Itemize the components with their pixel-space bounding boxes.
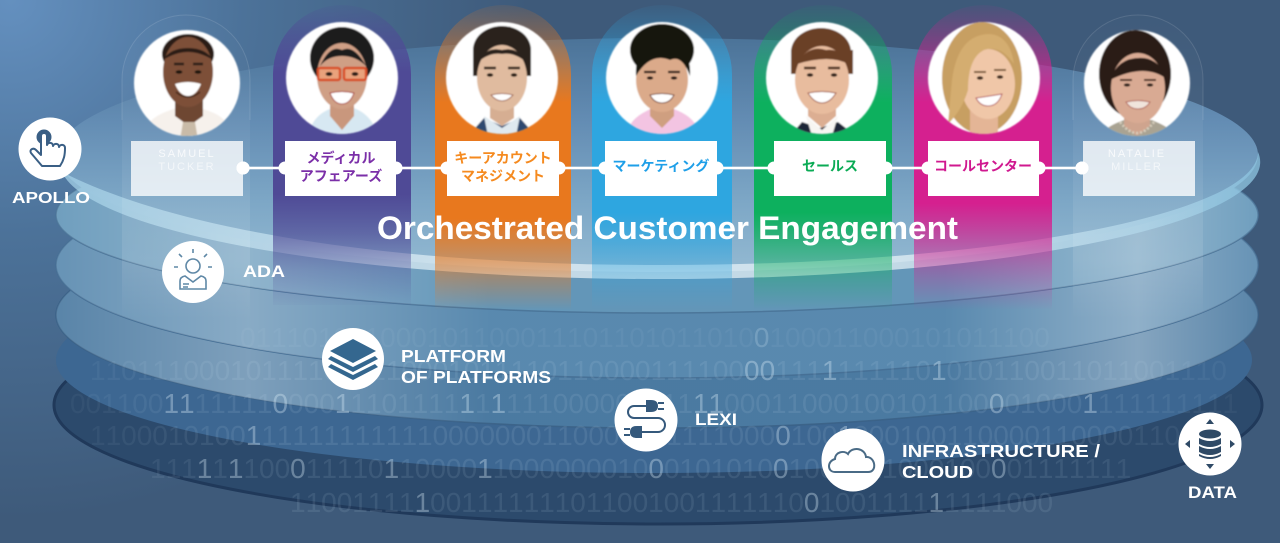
label box: call center: [928, 141, 1039, 196]
bright rim of top disk: [62, 152, 1260, 279]
column: key account management: [435, 5, 571, 310]
icon: ADA person with lightbulb: [162, 241, 224, 303]
portrait: medical affairs woman: [286, 22, 398, 136]
label box: Natalie Miller: [1076, 141, 1195, 196]
icon: data cylinder with arrows: [1178, 412, 1242, 476]
label: DATA: DATA: [1188, 484, 1237, 502]
label: infrastructure / cloud: [902, 441, 1100, 482]
label box: Samuel Tucker: SAMUEL: [158, 148, 216, 160]
label box: sales: [774, 141, 886, 196]
label box: medical affairs: [285, 141, 396, 196]
label box: medical affairs: メディカル: [306, 150, 376, 166]
portrait: call center woman: [928, 22, 1040, 136]
label box: key account management: キーアカウント: [454, 150, 552, 166]
label: ADA: ADA: [243, 263, 285, 281]
label: platform of platforms: PLATFORM: [401, 346, 506, 366]
label: infrastructure / cloud: CLOUD: [902, 462, 973, 482]
label: LEXI: LEXI: [695, 411, 737, 429]
column: Samuel: [122, 15, 250, 320]
label box: sales: セールス: [802, 158, 858, 174]
label box: Natalie Miller: NATALIE: [1108, 148, 1166, 160]
portrait: Natalie: [1084, 30, 1190, 140]
icon: cloud: [822, 428, 884, 492]
label box: medical affairs: アフェアーズ: [300, 168, 382, 184]
label box: Natalie Miller: MILLER: [1111, 161, 1163, 173]
label box: Samuel Tucker: [131, 141, 250, 196]
label box: key account management: マネジメント: [461, 168, 545, 184]
label: platform of platforms: OF PLATFORMS: [401, 367, 551, 387]
label box: marketing: [605, 141, 717, 196]
icon: Lexi plugs: [614, 388, 678, 452]
icon: Apollo hand: [18, 118, 82, 180]
binary data pattern: 1100111110011111110110010011111100100111111111000: [290, 487, 1053, 518]
column: marketing: [592, 5, 732, 310]
binary data pattern: 001100111111100001110111111111100000001111000110001001011000010001111111111: [70, 388, 1238, 419]
label: infrastructure / cloud: INFRASTRUCTURE /: [902, 441, 1100, 461]
label box: Samuel Tucker: TUCKER: [158, 161, 216, 173]
binary data pattern: [70, 322, 1238, 518]
label box: call center: コールセンター: [934, 158, 1032, 174]
connector line with nodes: [236, 162, 1088, 174]
title: Orchestrated Customer Engagement: [377, 210, 958, 246]
binary data pattern: 111111100011110110000110000000100010101001001011000100001111111: [150, 453, 1131, 484]
portrait: key account man: [446, 22, 558, 136]
binary data pattern: 0111010110001011000111011010110100100011000101011100: [240, 322, 1050, 353]
column: sales: [754, 5, 892, 310]
column: medical affairs: [273, 5, 411, 305]
column: call center: [914, 5, 1052, 310]
label box: key account management: [447, 141, 559, 196]
portrait: sales man: [766, 22, 878, 136]
binary data pattern: 1101110001011110011100010111101100001111000011111111101010110011011001110: [90, 355, 1227, 386]
label box: marketing: マーケティング: [613, 158, 709, 174]
icon: platform layers: [322, 328, 384, 390]
label: APOLLO: APOLLO: [12, 190, 90, 207]
portrait: Samuel: [134, 30, 240, 140]
portrait: marketing man: [606, 22, 718, 136]
column: Natalie: [1073, 15, 1203, 320]
label: platform of platforms: [401, 346, 551, 387]
binary data pattern: 110001010011111111111100000001100000111110000100100010011000011000011001: [90, 420, 1211, 451]
